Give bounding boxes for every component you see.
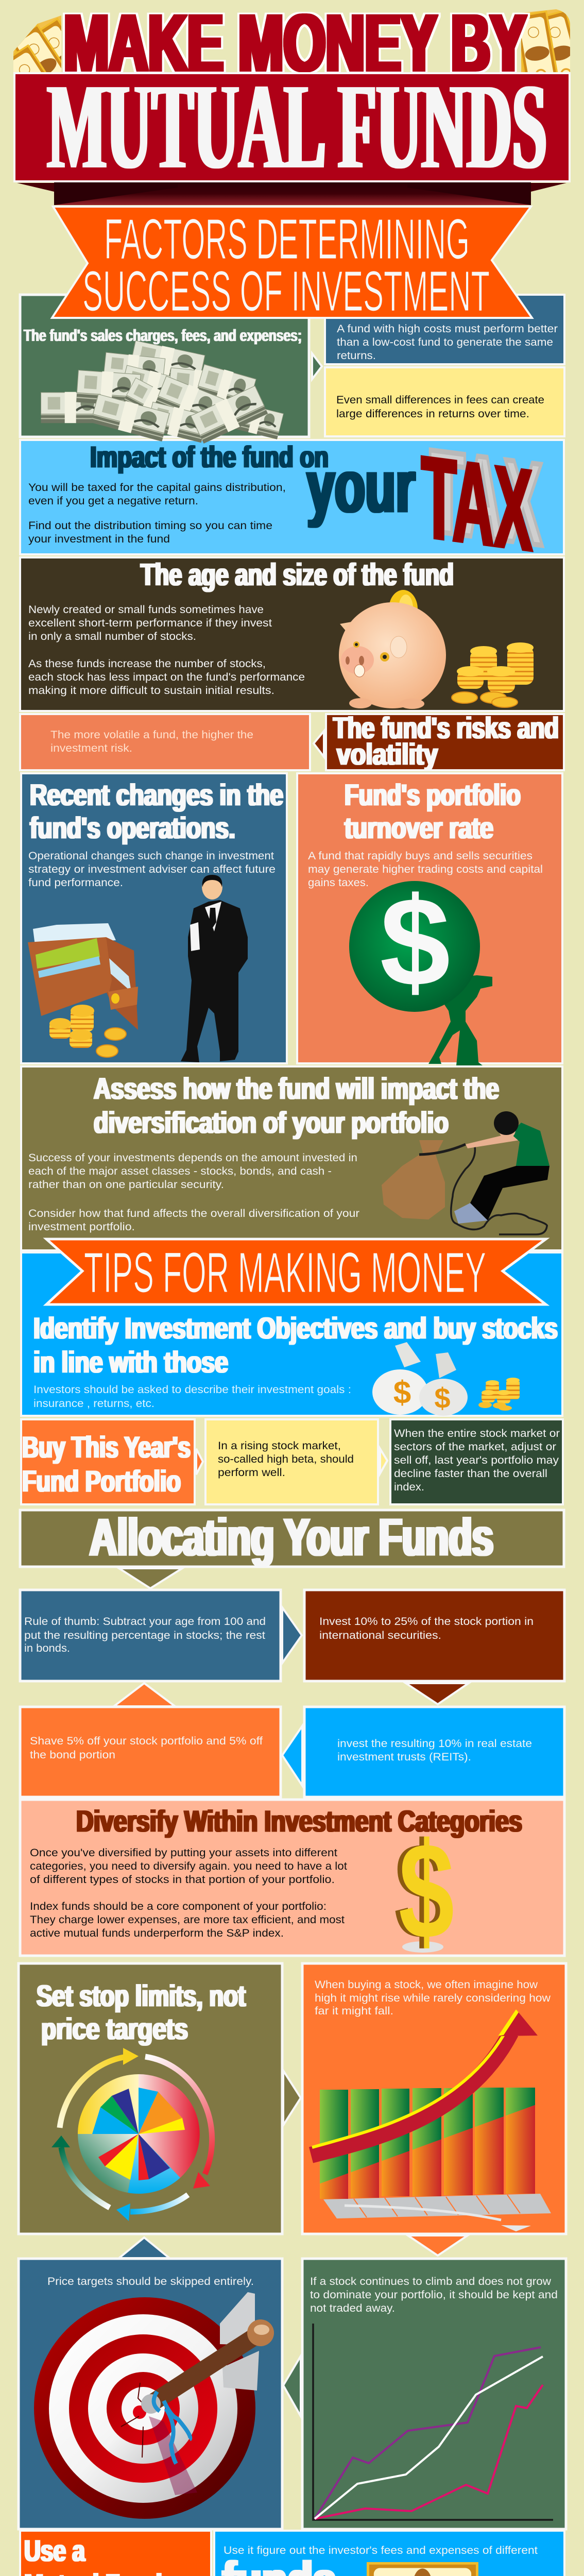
banner background: [14, 73, 570, 181]
text: international securities.: [319, 1630, 441, 1641]
arrow: blue up: [119, 2238, 169, 2258]
heading: diversification of your portfolio: [94, 1106, 449, 1140]
panel: portfolio turnover: [297, 773, 562, 1065]
text: returns.: [337, 350, 376, 362]
arrow: olive down: [119, 1568, 182, 1588]
arrow: blue right: [282, 1607, 302, 1663]
text: high it might rise while rarely considering how: [315, 1992, 551, 2004]
heading: volatility: [337, 738, 438, 771]
icon: piggy bank: [339, 590, 446, 709]
banner fold: [17, 182, 566, 205]
text: Operational changes such change in investment: [28, 850, 274, 862]
chart: pie wheel with cycle arrows: [51, 2048, 212, 2221]
heading: [22, 1431, 191, 1498]
text: [28, 850, 276, 889]
decorative gold bills, right: [521, 9, 570, 72]
title: make money by: [0, 0, 584, 131]
text: The more volatile a fund, the higher the: [50, 729, 253, 741]
panel: volatile fund text: [20, 714, 310, 770]
icon: money bags: $: [393, 1375, 411, 1411]
panel: recent changes: [21, 773, 287, 1063]
text: Rule of thumb: Subtract your age from 100 and: [24, 1616, 266, 1628]
icon: gold dollar: $: [399, 1815, 454, 1968]
panel: risks and volatility: [326, 711, 564, 771]
heading: in line with those: [33, 1346, 228, 1379]
icon: coins: [478, 1378, 520, 1411]
banner: allocating your funds: [20, 1507, 564, 1567]
heading: [37, 1979, 246, 2046]
text: Newly created or small funds sometimes have: [28, 604, 264, 616]
text: to dominate your portfolio, it should be kept and: [310, 2289, 558, 2301]
heading: [94, 1072, 499, 1140]
panel: assess diversification: [21, 1066, 562, 1250]
chart: rising bars and arrow: [311, 2009, 551, 2231]
heading: Set stop limits, not: [37, 1979, 246, 2013]
text: [315, 1979, 551, 2017]
icon: person carrying dollar: $: [380, 871, 450, 1013]
text: Investors should be asked to describe their investment goals :: [33, 1384, 351, 1396]
text: the bond portion: [30, 1749, 115, 1761]
heading: Buy This Year's: [22, 1431, 191, 1464]
text: Shave 5% off your stock portfolio and 5% off: [30, 1735, 263, 1747]
line chart: [313, 2324, 553, 2520]
panel: buy this year's fund portfolio: [21, 1419, 195, 1504]
icon: businessman: [181, 875, 248, 1062]
text: making it more difficult to sustain initial results.: [28, 685, 274, 697]
panel: age and size of fund: [20, 557, 564, 711]
icon: target with arrow: [34, 2292, 274, 2519]
heading: [24, 2534, 199, 2576]
heading: [33, 1312, 558, 1379]
icon: wallet: [28, 923, 138, 1030]
text: A fund with high costs must perform better: [337, 323, 558, 335]
panel: sales charges and fees: [20, 295, 309, 437]
text: Consider how that fund affects the overall diversification of your: [28, 1208, 359, 1219]
text: insurance , returns, etc.: [33, 1398, 154, 1410]
ribbon: tips for making money: [46, 1239, 546, 1304]
panel: when buying a stock: [302, 1963, 566, 2234]
heading: Use a: [24, 2534, 85, 2568]
heading: Fund Portfolio: [22, 1465, 181, 1498]
arrow: orange right: [196, 1449, 203, 1475]
arrow: orange down: [408, 2235, 468, 2256]
arrow: orange up: [114, 1683, 175, 1706]
text: each stock has less impact on the fund's performance: [28, 671, 305, 683]
text: not traded away.: [310, 2302, 395, 2314]
text: even if you get a negative return.: [28, 495, 198, 507]
arrow: brown down: [406, 1683, 469, 1704]
icon: banknotes: [367, 2562, 485, 2576]
text: active mutual funds underperform the S&P index.: [30, 1927, 284, 1939]
text: [394, 1428, 560, 1493]
heading: fund's operations.: [30, 811, 235, 845]
icon: coins: [49, 1005, 126, 1057]
panel: diversify within categories: [20, 1800, 564, 1968]
heading: your: your: [307, 444, 415, 528]
text: of different types of stocks in that portion of your portfolio.: [30, 1874, 335, 1886]
text: [28, 604, 305, 697]
text: far it might fall.: [315, 2005, 393, 2017]
text: Price targets should be skipped entirely.: [47, 2276, 254, 2287]
arrow: olive right: [283, 2071, 301, 2125]
text: fund performance.: [28, 877, 123, 889]
text: A fund that rapidly buys and sells securities: [308, 850, 533, 862]
text: may generate higher trading costs and capital: [308, 863, 543, 875]
text: Once you've diversified by putting your assets into different: [30, 1847, 337, 1859]
text: [30, 1735, 263, 1761]
text: [218, 1440, 354, 1479]
icon: person carrying dollar: [349, 871, 492, 1065]
3D word TAX: [421, 423, 543, 578]
heading: Fund's portfolio: [345, 778, 521, 812]
panel: price targets: [19, 2259, 282, 2529]
panel: high costs: [325, 295, 564, 364]
text: [336, 394, 544, 420]
text: categories, you need to diversify again. you need to have a lot: [30, 1860, 347, 1872]
heading: [30, 778, 283, 845]
text: index.: [394, 1481, 424, 1493]
ribbon: factors determining success of investment: [52, 207, 532, 323]
panel: market sell off: [390, 1419, 563, 1504]
text: [308, 850, 543, 889]
panel: impact on tax: [20, 423, 564, 578]
text: You will be taxed for the capital gains distribution,: [28, 482, 286, 494]
text: [337, 1738, 532, 1763]
text: [310, 2276, 558, 2314]
panel: rising market: [205, 1419, 378, 1504]
text: [30, 1847, 347, 1939]
heading: The fund's sales charges, fees, and expenses;: [24, 326, 302, 345]
text: If a stock continues to climb and does not grow: [310, 2276, 552, 2287]
text: As these funds increase the number of stocks,: [28, 658, 266, 670]
text: Invest 10% to 25% of the stock portion in: [319, 1616, 534, 1628]
icon: money bags: [372, 1342, 468, 1416]
icon: gold dollar: $: [394, 1815, 450, 1968]
heading: turnover rate: [345, 811, 493, 845]
text: [33, 1384, 351, 1410]
text: investment trusts (REITs).: [337, 1751, 471, 1763]
text: large differences in returns over time.: [336, 408, 529, 420]
text: [28, 1152, 359, 1233]
arrow: blue left: [282, 1726, 302, 1786]
text: Even small differences in fees can create: [336, 394, 544, 406]
heading: [345, 778, 521, 845]
arrow: yellow right: [380, 1449, 387, 1473]
heading: The age and size of the fund: [141, 557, 454, 592]
panel: shave five percent: [20, 1707, 281, 1797]
text: invest the resulting 10% in real estate: [337, 1738, 532, 1750]
text: [24, 1616, 266, 1654]
panel: rule of thumb: [20, 1590, 281, 1681]
panel: small differences: [325, 367, 564, 436]
text: They charge lower expenses, are more tax efficient, and most: [30, 1914, 345, 1926]
text: excellent short-term performance if they invest: [28, 617, 272, 629]
arrow: green right: [312, 353, 322, 379]
text: decline faster than the overall: [394, 1468, 547, 1480]
text: Find out the distribution timing so you can time: [28, 520, 272, 532]
panel: international securities: [304, 1590, 564, 1681]
text: When buying a stock, we often imagine how: [315, 1979, 538, 1991]
text: investment risk.: [50, 742, 132, 754]
heading: [333, 711, 559, 771]
icon: money bags: $: [434, 1382, 451, 1414]
text: in only a small number of stocks.: [28, 631, 196, 642]
heading: Recent changes in the: [30, 778, 283, 812]
text: Index funds should be a core component of your portfolio:: [30, 1901, 327, 1912]
arrow: brown left: [314, 731, 324, 757]
text: [28, 482, 286, 545]
panel: investor fees: [214, 2531, 564, 2576]
text: put the resulting percentage in stocks; the rest: [24, 1630, 265, 1641]
panel: set stop limits: [19, 1963, 282, 2234]
text: each of the major asset classes - stocks, bonds, and cash -: [28, 1165, 332, 1177]
panel: REITs: [304, 1707, 564, 1797]
text: perform well.: [218, 1467, 285, 1479]
panel: identify investment objectives: [21, 1252, 562, 1416]
text: sectors of the market, adjust or: [394, 1441, 556, 1453]
panel: cost calculator: [20, 2531, 211, 2576]
text: Use it figure out the investor's fees and expenses of different: [224, 2545, 538, 2556]
banner: mutual funds: [14, 59, 570, 205]
text: When the entire stock market or: [394, 1428, 560, 1439]
icon: man pulling money bag: [382, 1111, 549, 1234]
text: investment portfolio.: [28, 1221, 135, 1233]
text: In a rising stock market,: [218, 1440, 341, 1452]
text: strategy or investment adviser can affect future: [28, 863, 276, 875]
icon: money pile: [41, 340, 284, 444]
text: than a low-cost fund to generate the same: [337, 336, 553, 348]
panel: keep climbing stocks: [302, 2259, 566, 2529]
text: gains taxes.: [308, 877, 369, 889]
text: [50, 729, 253, 754]
text: rather than on one particular security.: [28, 1179, 224, 1191]
heading: Impact of the fund on: [90, 440, 329, 474]
text: so-called high beta, should: [218, 1453, 354, 1465]
decorative gold bills, left: [13, 15, 61, 72]
icon: coin stacks: [452, 642, 534, 707]
text: sell off, last year's portfolio may: [394, 1454, 559, 1466]
text: [337, 323, 558, 362]
arrow: green left: [283, 2356, 301, 2416]
text: [319, 1616, 534, 1641]
text: Success of your investments depends on the amount invested in: [28, 1152, 357, 1164]
text: in bonds.: [24, 1642, 70, 1654]
text: your investment in the fund: [28, 533, 170, 545]
heading: price targets: [41, 2012, 188, 2046]
